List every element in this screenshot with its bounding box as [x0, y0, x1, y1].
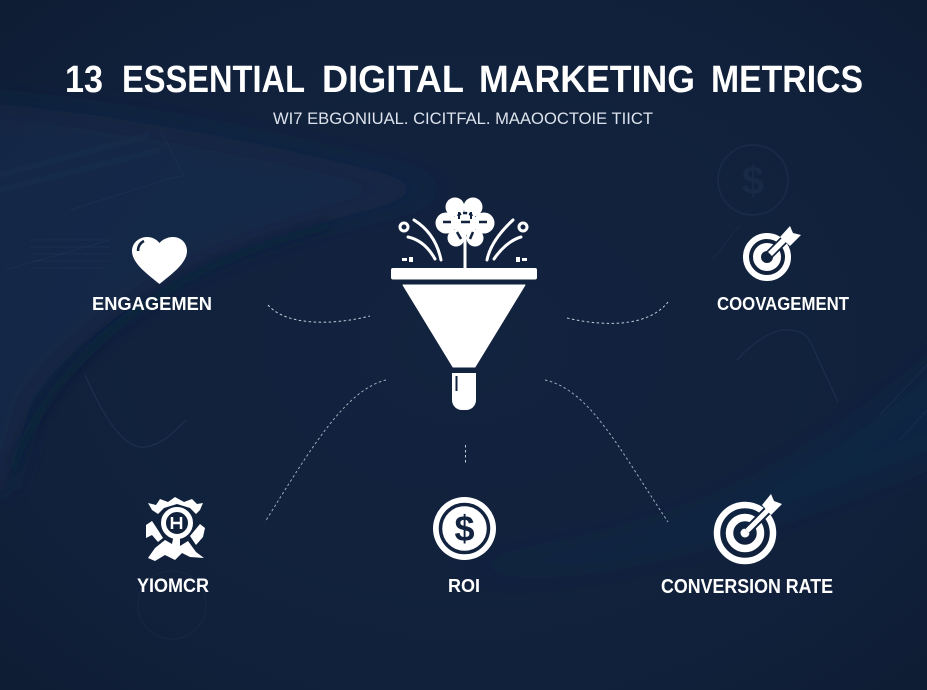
connector lines	[265, 302, 668, 522]
icon: target top right	[746, 226, 801, 278]
icon: heart	[132, 237, 187, 284]
label: engagement right: COOVAGEMENT	[717, 294, 849, 314]
label: bottom left: YIOMCR	[137, 576, 209, 597]
label: engagement left: ENGAGEMEN	[92, 294, 212, 314]
title	[65, 59, 863, 101]
flower stem	[464, 228, 466, 269]
icon: ROI coin	[433, 497, 496, 560]
faint background	[0, 100, 927, 639]
title: METRICS	[711, 59, 863, 101]
title: DIGITAL	[322, 59, 464, 101]
icon: bottom left emblem	[146, 497, 205, 561]
title: ESSENTIAL	[122, 59, 305, 101]
icon: funnel with flower	[391, 198, 537, 410]
faint background: $	[742, 159, 764, 203]
funnel cone	[403, 285, 525, 367]
icon: target bottom right	[717, 494, 782, 561]
title: 13	[65, 59, 103, 101]
icon: ROI coin: $	[454, 508, 475, 549]
subtitle: WI7 EBGONIUAL. CICITFAL. MAAOOCTOIE TIICT	[273, 109, 653, 128]
title: MARKETING	[479, 59, 695, 101]
label: conversion rate: CONVERSION RATE	[661, 576, 833, 598]
label: ROI: ROI	[448, 576, 480, 596]
funnel rim	[391, 268, 537, 280]
flower sprays	[408, 220, 521, 260]
flower petals	[436, 198, 494, 246]
funnel spout	[452, 373, 476, 410]
